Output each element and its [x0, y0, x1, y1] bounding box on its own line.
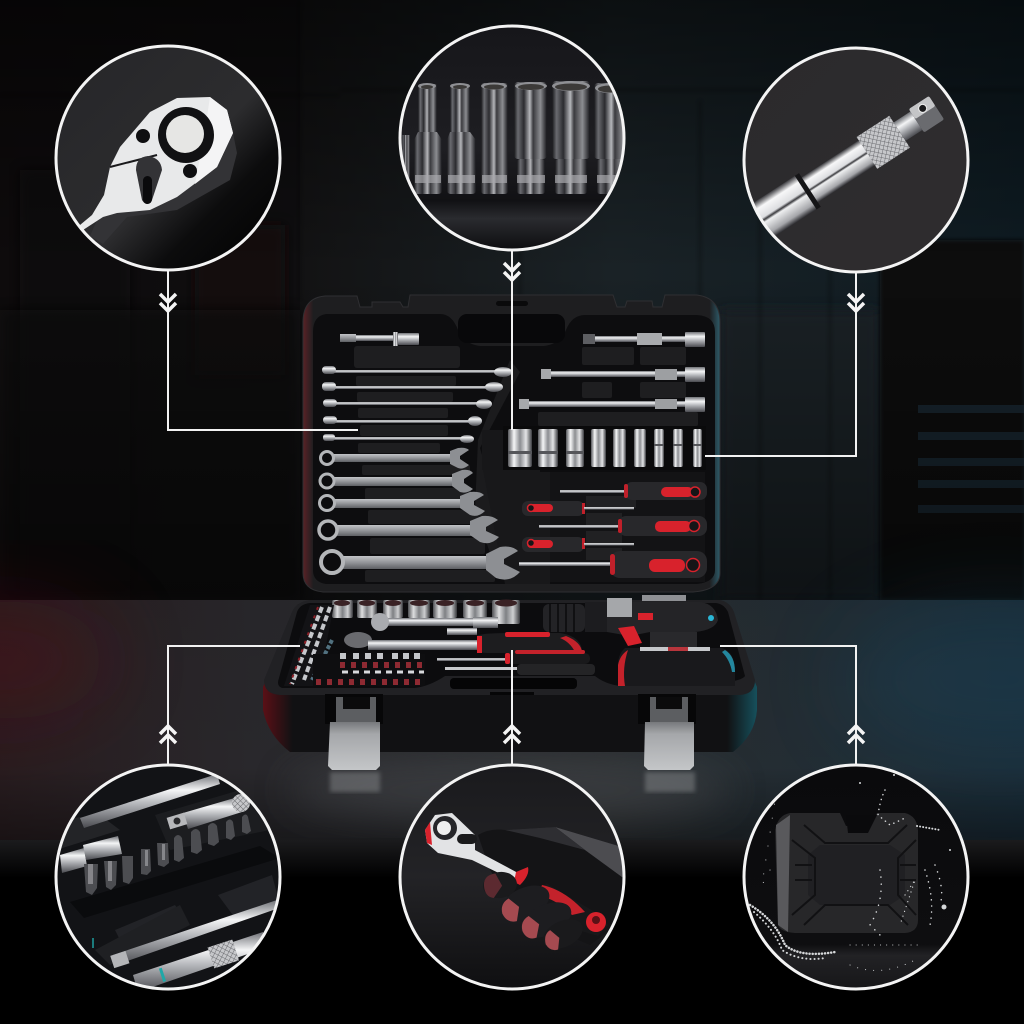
right latch — [638, 694, 696, 770]
battery pack — [618, 647, 735, 686]
screwdrivers — [519, 482, 707, 578]
table surface — [0, 600, 1024, 1024]
large combination wrenches — [319, 448, 520, 580]
latch reflections — [330, 772, 695, 792]
small sockets column — [284, 605, 334, 686]
cordless drill — [543, 595, 718, 648]
base tray rim — [264, 600, 755, 695]
top left extension socket — [340, 332, 419, 346]
arrow: double chevrons — [160, 263, 864, 743]
detail circle: deep sockets — [400, 26, 630, 250]
lid inner tray — [313, 314, 715, 584]
deep sockets row — [503, 426, 706, 470]
detail circle: bits and bars — [56, 765, 280, 992]
ratchet, base — [344, 613, 582, 653]
detail circle: ratchet head — [56, 46, 280, 270]
foam inserts lid — [354, 346, 698, 582]
carry handle recess — [450, 678, 577, 689]
case lid shell — [303, 295, 720, 592]
thin combination spanners — [322, 366, 512, 443]
base tray interior — [278, 603, 745, 688]
tool case — [263, 295, 757, 792]
detail circle: extension bar — [736, 48, 968, 272]
central diagonal foam — [475, 360, 520, 570]
extension bars — [519, 332, 705, 412]
case base shell — [263, 604, 757, 752]
background: workshop wall — [0, 0, 1024, 600]
handle recess — [458, 314, 565, 343]
left latch — [325, 694, 383, 770]
screwdrivers, base — [437, 650, 595, 675]
detail circle: case in water splash — [744, 765, 968, 989]
bit rows — [313, 653, 425, 686]
socket row, base — [332, 600, 520, 624]
detail circle: gloved hand with ratchet — [400, 765, 626, 989]
connector lines — [168, 250, 856, 765]
